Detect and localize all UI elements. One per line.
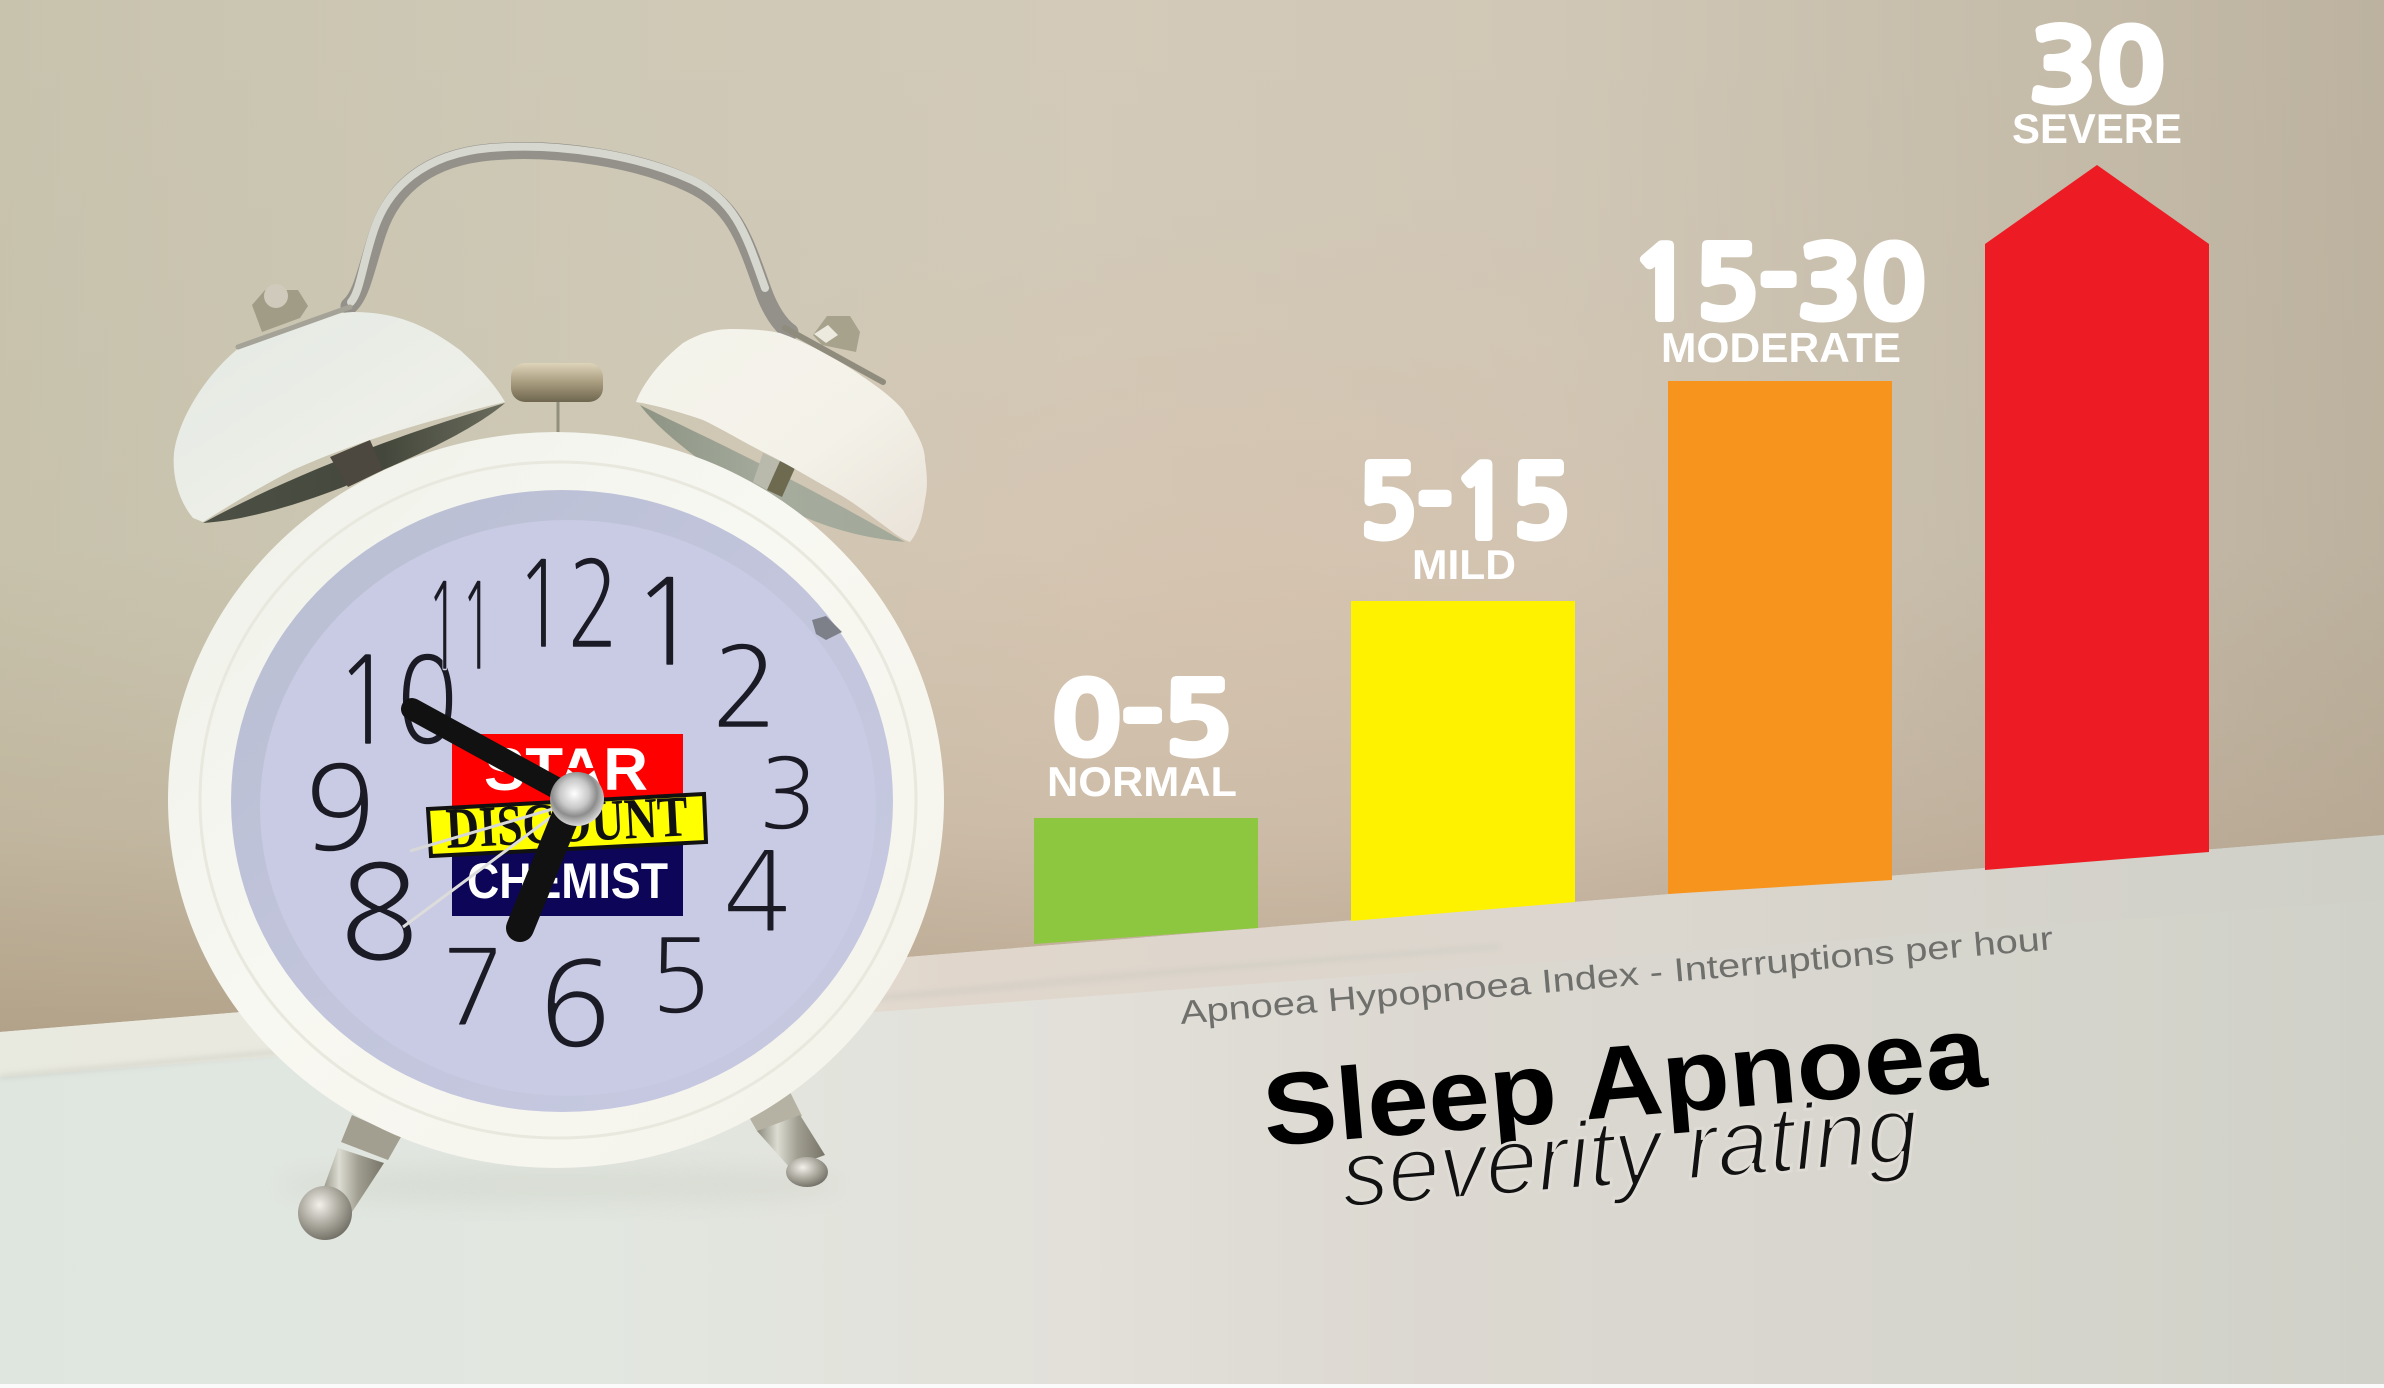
right screw bbox=[785, 316, 883, 382]
label: 0-5 normal bbox=[1047, 672, 1237, 805]
logo star bbox=[567, 757, 597, 786]
label: 15-30 moderate: 15-30 bbox=[1630, 236, 1926, 333]
Star Discount Chemist logo bbox=[428, 734, 706, 916]
clock numerals: 4 bbox=[724, 837, 790, 947]
logo word CHEMIST: CHEMIST bbox=[467, 853, 668, 909]
body rim groove bbox=[200, 462, 916, 1138]
bar: normal bbox=[1034, 818, 1258, 944]
clock numerals: 11 bbox=[426, 567, 494, 687]
label: 30 severe: SEVERE bbox=[2012, 105, 2182, 152]
title: Sleep Apnoea bbox=[1258, 994, 1992, 1168]
clock shadow on shelf bbox=[280, 1165, 840, 1205]
label: 30 severe: 30 bbox=[2029, 19, 2165, 116]
logo word STAR: STAR bbox=[484, 736, 648, 803]
label: 5-15 mild: MILD bbox=[1412, 541, 1516, 588]
clock numerals: 8 bbox=[339, 848, 419, 980]
label: 15-30 moderate: MODERATE bbox=[1661, 324, 1901, 371]
label: 15-30 moderate bbox=[1630, 236, 1926, 371]
logo yellow strip bbox=[428, 794, 706, 856]
left foot bbox=[298, 1115, 401, 1240]
clock numerals: 7 bbox=[441, 936, 505, 1041]
clock face bbox=[260, 520, 876, 1096]
shelf surface bbox=[0, 835, 2384, 1388]
alarm clock bbox=[168, 147, 944, 1240]
label: 0-5 normal: 0-5 bbox=[1052, 672, 1232, 769]
left screw bbox=[238, 284, 350, 347]
logo word DISCOUNT: DISCOUNT bbox=[444, 783, 689, 861]
wall background bbox=[0, 0, 2384, 1100]
hammer bbox=[511, 363, 603, 440]
label: 5-15 mild: 5-15 bbox=[1358, 455, 1570, 552]
clock hands bbox=[403, 709, 604, 928]
clock numerals: 2 bbox=[711, 632, 779, 744]
clock body bbox=[168, 432, 944, 1168]
clock numerals: 12 bbox=[514, 545, 620, 665]
logo red panel bbox=[452, 734, 683, 806]
axis caption: Apnoea Hypopnoea Index - Interruptions per hour bbox=[1178, 919, 2054, 1031]
clock face recess bbox=[231, 490, 893, 1112]
clock numerals: 3 bbox=[758, 746, 818, 844]
clock numerals: 1 bbox=[630, 563, 702, 683]
clock numerals: 6 bbox=[539, 946, 611, 1065]
left bell bbox=[174, 284, 505, 523]
subtitle: severity rating bbox=[1337, 1076, 1922, 1227]
clock numerals: 5 bbox=[649, 925, 711, 1028]
clock face notch bbox=[812, 616, 842, 640]
logo navy panel bbox=[452, 844, 683, 916]
label: 0-5 normal: NORMAL bbox=[1047, 758, 1237, 805]
bar: mild bbox=[1351, 601, 1575, 921]
label: 30 severe bbox=[2012, 19, 2182, 152]
bar: moderate bbox=[1668, 381, 1892, 894]
bar: severe arrow bbox=[1985, 165, 2209, 870]
clock numerals: 10 bbox=[334, 640, 458, 762]
bell handle bbox=[349, 147, 790, 332]
clock numerals bbox=[304, 545, 818, 1065]
right bell bbox=[636, 316, 927, 542]
clock numerals: 9 bbox=[304, 750, 376, 868]
right foot bbox=[745, 1092, 828, 1187]
